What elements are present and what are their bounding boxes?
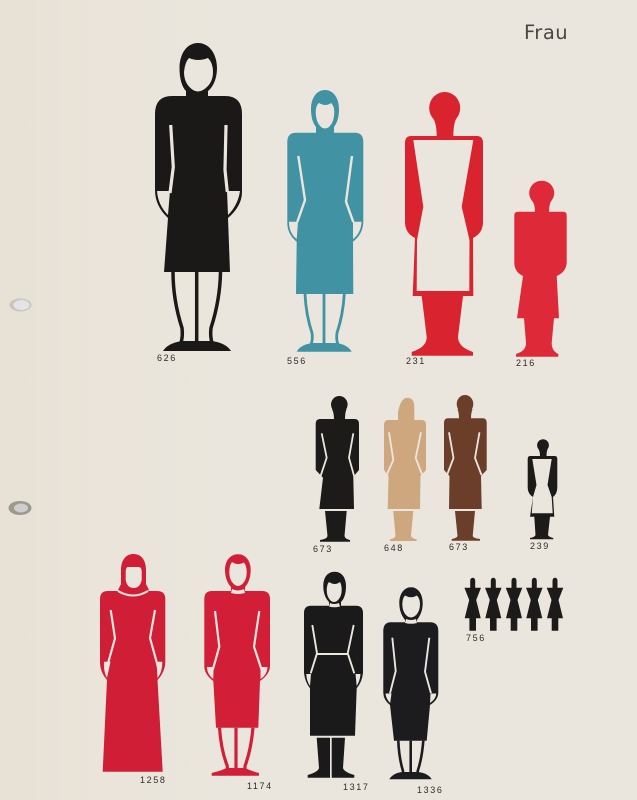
small figure 5 xyxy=(547,578,563,631)
label 1258: 1258 xyxy=(140,775,166,785)
small figure 3 xyxy=(506,578,522,631)
label 1317: 1317 xyxy=(343,782,369,792)
row of five small figures xyxy=(464,578,563,631)
figure 673: brown silhouette xyxy=(444,395,487,541)
label 231: 231 xyxy=(406,356,426,366)
figure 556: teal dress xyxy=(287,90,363,352)
figure 648: tan silhouette xyxy=(384,398,426,541)
label 1336: 1336 xyxy=(417,785,443,795)
punched hole: upper xyxy=(10,298,32,312)
figure 626: black dress, short hair xyxy=(155,43,242,351)
title: Frau xyxy=(524,21,568,44)
label 673: 673 xyxy=(313,544,333,554)
punched hole: lower xyxy=(8,501,32,515)
figure 239: small black with white apron xyxy=(528,439,557,539)
figure 231: red with white apron xyxy=(405,92,483,356)
label 239: 239 xyxy=(530,541,550,551)
small figure 2 xyxy=(485,578,502,631)
figure 673: black silhouette xyxy=(316,396,359,542)
label 556: 556 xyxy=(287,356,307,366)
figure 1258: red long dress with hood xyxy=(100,554,165,772)
label 216: 216 xyxy=(516,358,536,368)
figure 1336: black dress, short hair xyxy=(383,587,438,779)
label 1174: 1174 xyxy=(247,781,273,791)
small figure 4 xyxy=(526,578,543,631)
label 648: 648 xyxy=(384,543,404,553)
label 673: 673 xyxy=(449,542,469,552)
small figure 1 xyxy=(464,578,481,631)
label 756: 756 xyxy=(466,633,486,643)
label 626: 626 xyxy=(157,353,177,363)
figure 1174: red dress, short hair xyxy=(204,554,270,776)
figure 216: small red silhouette xyxy=(514,181,567,357)
figure 1317: black belted dress with boots xyxy=(304,572,363,778)
